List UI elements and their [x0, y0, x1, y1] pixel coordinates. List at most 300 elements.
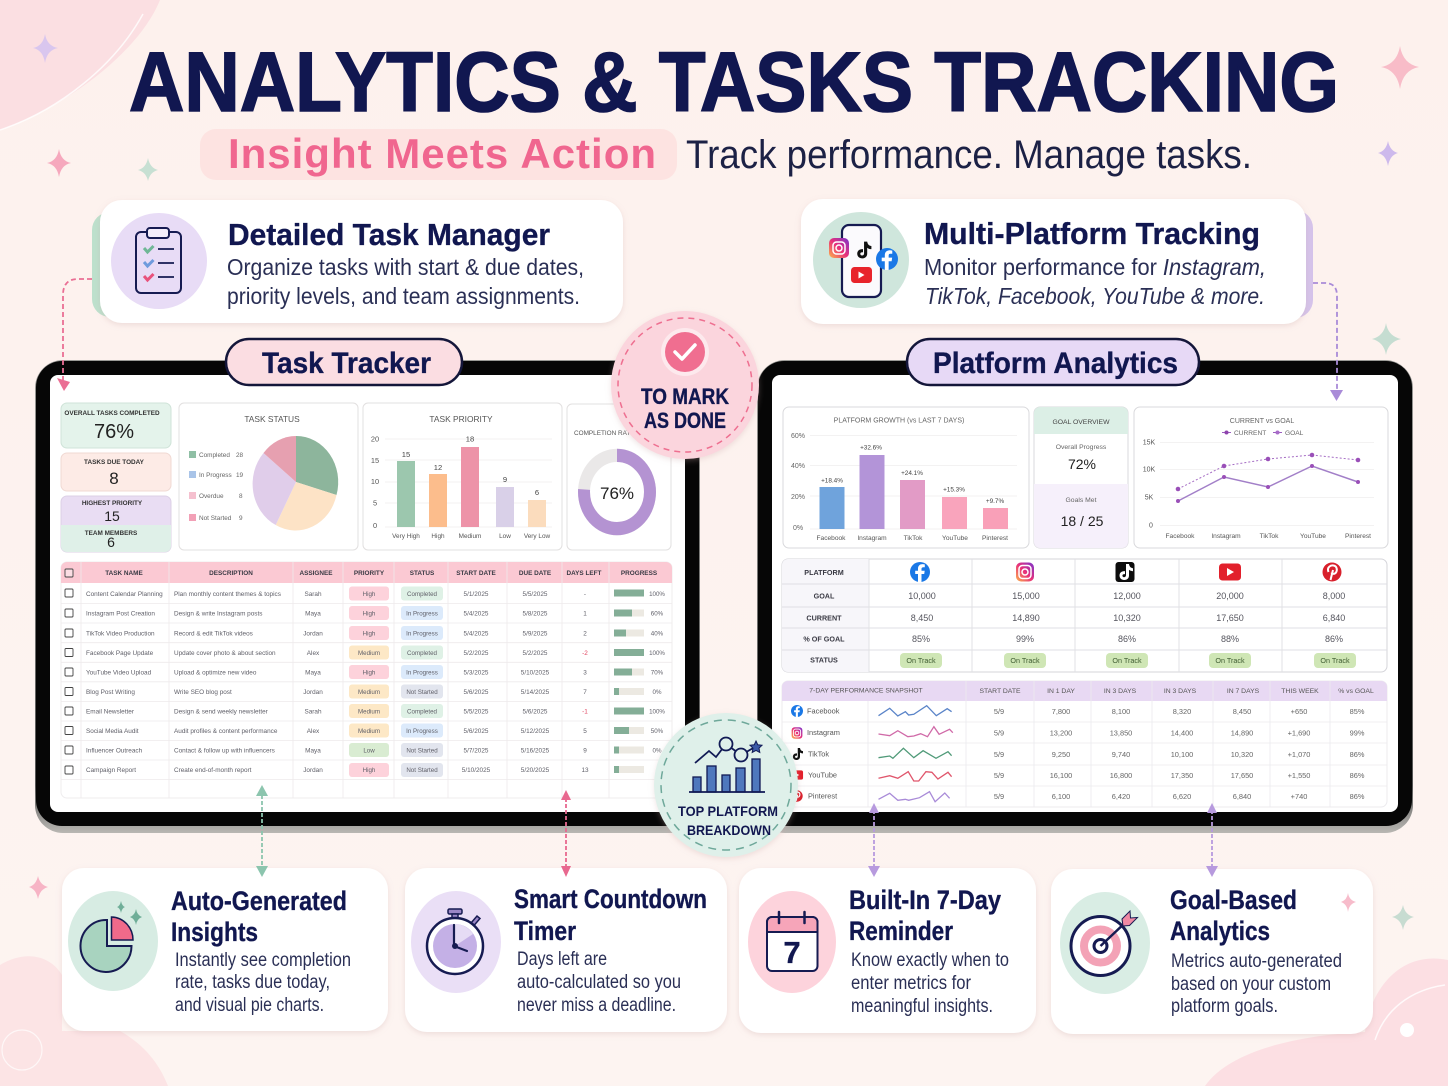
row: instagram post creation: Instagram Post Creation [86, 610, 155, 618]
row: facebook [791, 705, 1365, 717]
row: influencer outreach: 9 [583, 748, 587, 754]
row: youtube video upload: 3 [583, 670, 587, 676]
heading: Timer [514, 916, 576, 946]
badge: to mark as done: AS DONE [644, 408, 726, 433]
row: pinterest: 6,840 [1233, 792, 1251, 801]
legend: 19 [236, 472, 244, 479]
table values: 86% [1118, 634, 1136, 644]
legend: 9 [239, 515, 243, 522]
body text [851, 950, 1009, 1017]
row: pinterest [791, 790, 1365, 802]
row: youtube: 17,650 [1231, 771, 1253, 780]
chart: task priority bars [363, 403, 562, 550]
row: social media audit: 5/6/2025 [464, 728, 489, 735]
row: tiktok video production: TikTok Video Production [86, 630, 155, 638]
table header: IN 3 DAYS [1104, 688, 1137, 695]
chart: task priority bars: 0 [373, 521, 377, 530]
table header: % vs GOAL [1338, 688, 1374, 695]
legend [1222, 430, 1304, 437]
row: facebook page update [65, 646, 665, 660]
row: pinterest: 6,100 [1052, 792, 1070, 801]
row: content calendar planning [65, 586, 665, 600]
icon: check mark [661, 328, 709, 376]
row: facebook page update: 100% [649, 650, 665, 657]
arrow: platform tracking to analytics [1313, 283, 1343, 401]
chart: current vs goal: 10K [1143, 466, 1156, 474]
body text: Instantly see completion [175, 950, 351, 971]
row: pinterest: 6,620 [1173, 792, 1191, 801]
row: email newsletter: Completed [407, 708, 438, 716]
legend: GOAL [1285, 430, 1304, 437]
row: tiktok video production: High [363, 630, 376, 638]
chart: current vs goal [1134, 407, 1388, 548]
body text: enter metrics for [851, 973, 972, 994]
row: social media audit: 5 [583, 728, 587, 735]
body text: auto-calculated so you [517, 972, 681, 993]
kpi: tasks due today: 8 [109, 469, 119, 488]
legend: In Progress [199, 472, 232, 479]
row: facebook page update: -2 [582, 650, 588, 657]
row: youtube: 86% [1350, 771, 1365, 780]
row: youtube: 17,350 [1171, 771, 1193, 780]
table header [809, 688, 1374, 695]
arrow: insights [256, 785, 268, 877]
heading: Smart Countdown [514, 884, 707, 914]
sparkle [1392, 905, 1414, 930]
heading: Reminder [849, 916, 953, 946]
table header: ASSIGNEE [299, 570, 333, 577]
heading: Insights [171, 917, 258, 947]
row: campaign report: Campaign Report [86, 767, 136, 774]
table header: IN 1 DAY [1047, 688, 1075, 695]
chart: platform growth: +15.3% [943, 486, 965, 494]
row: pinterest: 86% [1350, 792, 1365, 801]
row: campaign report: 13 [581, 767, 589, 774]
row: youtube: 5/9 [994, 771, 1004, 780]
arrow: reminder [868, 803, 880, 877]
row: content calendar planning: 5/1/2025 [464, 591, 489, 598]
row: influencer outreach: Contact & follow up with influencers [174, 748, 275, 754]
table header: IN 7 DAYS [1227, 688, 1260, 695]
row: campaign report: 5/10/2025 [462, 767, 491, 774]
icon: bar chart with trend line [689, 738, 765, 792]
chart: current vs goal: YouTube [1300, 533, 1326, 540]
card: auto-generated insights [62, 868, 388, 1031]
kpi: highest priority and team members: 15 [104, 508, 120, 524]
tablet: platform analytics [757, 360, 1413, 833]
row: facebook page update: Alex [307, 650, 320, 657]
sparkle [29, 876, 48, 899]
row: instagram post creation: 60% [651, 610, 664, 618]
row: content calendar planning: Plan monthly content themes & topics [174, 591, 281, 598]
row: content calendar planning: - [584, 591, 586, 598]
panel: goal overview: GOAL OVERVIEW [1052, 419, 1110, 426]
row: pinterest: +740 [1291, 792, 1307, 801]
row labels: CURRENT [806, 614, 842, 622]
table header: START DATE [456, 570, 496, 577]
row: influencer outreach: 0% [653, 748, 662, 754]
row labels: % OF GOAL [803, 634, 845, 644]
heading: Multi-Platform Tracking [924, 216, 1260, 251]
chart: platform growth: Instagram [857, 535, 887, 542]
row: youtube: 16,100 [1050, 771, 1072, 780]
row: instagram post creation: In Progress [406, 610, 438, 618]
table header: STATUS [410, 570, 435, 577]
heading pill: task tracker [226, 339, 462, 385]
table values: 15,000 [1012, 591, 1040, 601]
body text: Organize tasks with start & due dates, [227, 254, 584, 280]
kpi: tasks due today: TASKS DUE TODAY [84, 459, 145, 466]
icon: youtube [1219, 564, 1241, 580]
chart: task priority bars: 15 [371, 456, 379, 465]
legend: CURRENT [1234, 430, 1266, 437]
row: youtube video upload: 70% [651, 670, 664, 676]
arrow: goal analytics [1206, 803, 1218, 877]
table values: 99% [1016, 634, 1034, 644]
subtitle tagline: Insight Meets Action [228, 130, 656, 177]
row: tiktok: 10,100 [1171, 750, 1193, 759]
row: influencer outreach: Influencer Outreach [86, 748, 143, 754]
decorative blob: bottom left [0, 956, 168, 1086]
chart: platform growth: +24.1% [901, 470, 923, 477]
heading pill: platform analytics [907, 339, 1199, 385]
table values: 12,000 [1113, 591, 1141, 601]
icon: clipboard checklist [111, 213, 207, 309]
chart: platform growth: 0% [793, 525, 803, 532]
row: youtube video upload: YouTube Video Upload [86, 670, 152, 676]
row: influencer outreach [65, 743, 662, 757]
row: tiktok: 9,740 [1112, 750, 1130, 759]
table values: 10,000 [908, 591, 936, 601]
body text: Know exactly when to [851, 950, 1009, 971]
callout: detailed task manager [92, 200, 623, 323]
panel: goal overview [1034, 407, 1128, 548]
arrow: task manager to tracker [57, 279, 92, 391]
chart: completion rate donut: COMPLETION RATE [574, 430, 635, 437]
row: social media audit: In Progress [406, 728, 438, 735]
heading: Built-In 7-Day [849, 885, 1001, 915]
body text [175, 950, 351, 1016]
chart: platform growth: +18.4% [821, 478, 843, 484]
row: blog post writing: Jordan [303, 689, 323, 696]
table: task list [61, 562, 672, 798]
row: social media audit: Medium [358, 728, 380, 735]
chart: task priority bars: 9 [503, 475, 507, 484]
subtitle description: Track performance. Manage tasks. [686, 133, 1252, 177]
chart: completion rate donut: 76% [600, 484, 634, 503]
chart: platform growth: 20% [791, 494, 805, 501]
row: influencer outreach: 5/16/2025 [521, 748, 550, 754]
chart: completion rate donut [567, 404, 671, 550]
chart: platform growth: PLATFORM GROWTH (vs LAST 7 DAYS) [834, 418, 964, 424]
row: email newsletter: Sarah [304, 708, 322, 716]
body text: rate, tasks due today, [175, 972, 330, 993]
row: facebook page update: Medium [358, 650, 380, 657]
table: platform goals [782, 559, 1387, 672]
subtitle [200, 129, 1252, 180]
row: instagram post creation: 1 [583, 610, 587, 618]
body text: platform goals. [1171, 996, 1278, 1017]
chart: task priority bars: Medium [459, 533, 481, 540]
legend [189, 451, 244, 522]
kpi: tasks due today [61, 453, 171, 491]
legend: Overdue [199, 493, 224, 500]
chart: task priority bars: 6 [535, 488, 539, 497]
row: blog post writing: 7 [583, 689, 587, 696]
row: youtube video upload: Upload & optimize new video [174, 670, 257, 676]
table header: PROGRESS [621, 570, 658, 577]
tablet: task tracker [35, 360, 700, 833]
chart: task priority bars: 5 [373, 498, 377, 508]
heading [514, 884, 707, 946]
row: facebook: 8,100 [1112, 707, 1130, 716]
row: instagram: 14,400 [1171, 728, 1193, 738]
decorative blob: bottom right [1205, 958, 1448, 1086]
row: influencer outreach: Low [363, 748, 375, 754]
row: facebook page update: 5/2/2025 [523, 650, 548, 657]
row: blog post writing: Write SEO blog post [174, 689, 232, 696]
panel: goal overview: Goals Met [1066, 497, 1097, 504]
row: blog post writing: 5/14/2025 [521, 689, 550, 696]
chart: task priority bars: 18 [466, 434, 474, 444]
table: 7-day performance snapshot [782, 681, 1387, 807]
table values: 6,840 [1323, 613, 1345, 623]
row: instagram post creation: 5/8/2025 [523, 610, 548, 618]
chart: current vs goal: 0 [1149, 522, 1153, 530]
sparkle [1378, 141, 1398, 166]
chart: current vs goal: 5K [1145, 494, 1154, 502]
row: facebook: 85% [1350, 707, 1365, 716]
row: instagram post creation: High [363, 610, 376, 618]
chart: platform growth: +9.7% [986, 498, 1004, 505]
row: social media audit: Social Media Audit [86, 728, 139, 735]
card: goal-based analytics [1051, 869, 1373, 1034]
body text: TikTok, Facebook, YouTube & more. [925, 283, 1265, 309]
body text: based on your custom [1171, 974, 1331, 995]
status pills: On Track [1112, 656, 1142, 665]
heading: Analytics [1170, 916, 1270, 946]
kpi: highest priority and team members [61, 496, 171, 552]
table header: START DATE [979, 688, 1021, 695]
table values: 10,320 [1113, 613, 1141, 623]
badge: to mark as done [611, 311, 759, 459]
sparkle [1372, 323, 1401, 355]
heading [171, 886, 347, 947]
row: email newsletter: -1 [582, 708, 588, 716]
icon: stopwatch [411, 891, 501, 993]
row: facebook page update: 5/2/2025 [464, 650, 489, 657]
status pills: On Track [1010, 656, 1040, 665]
body text [924, 254, 1266, 309]
row: blog post writing: 0% [653, 689, 662, 696]
panel: goal overview: 72% [1068, 456, 1096, 472]
kpi: highest priority and team members: 6 [107, 534, 115, 550]
table header: 7-DAY PERFORMANCE SNAPSHOT [809, 688, 923, 694]
chart: current vs goal: Instagram [1211, 533, 1241, 540]
row: campaign report: 5/20/2025 [521, 767, 550, 774]
badge: top platform breakdown: BREAKDOWN [687, 822, 771, 838]
table values: 17,650 [1216, 613, 1244, 623]
chart: platform growth: TikTok [904, 535, 923, 542]
row: content calendar planning: Sarah [304, 591, 322, 598]
row: content calendar planning: 100% [649, 591, 665, 598]
callout: multi-platform tracking [801, 199, 1313, 324]
row: influencer outreach: 5/7/2025 [464, 748, 489, 754]
heading: Detailed Task Manager [228, 217, 550, 252]
heading: Auto-Generated [171, 886, 347, 916]
chart: platform growth [783, 407, 1029, 548]
row labels: GOAL [814, 592, 835, 600]
row: content calendar planning: High [363, 591, 376, 598]
chart: platform growth: Facebook [817, 535, 846, 542]
body text: meaningful insights. [851, 996, 993, 1017]
sparkle [1341, 893, 1356, 912]
sparkle [33, 34, 58, 63]
row: email newsletter: Medium [358, 708, 380, 716]
table header [65, 569, 658, 577]
row: youtube video upload: Maya [305, 670, 321, 676]
row: email newsletter: Design & send weekly newsletter [174, 708, 269, 716]
row: tiktok video production [65, 626, 664, 640]
row: instagram: 99% [1350, 728, 1365, 738]
body text: priority levels, and team assignments. [227, 283, 580, 309]
row labels [803, 568, 845, 664]
chart: platform growth: 40% [791, 463, 805, 470]
chart: platform growth: 60% [791, 433, 805, 440]
title: ANALYTICS & TASKS TRACKING [129, 35, 1339, 129]
icon: pie chart [68, 891, 158, 991]
row: instagram post creation: Maya [305, 610, 321, 618]
row: youtube: 16,800 [1110, 771, 1132, 780]
table header: DESCRIPTION [209, 570, 253, 577]
legend: 28 [236, 452, 244, 459]
row: instagram: 13,850 [1110, 728, 1132, 738]
icon: calendar: 7 [783, 935, 801, 970]
row: youtube: YouTube [808, 770, 837, 780]
chart: task priority bars: Low [499, 533, 511, 540]
row: blog post writing: Not Started [406, 689, 438, 696]
row: tiktok video production: Record & edit TikTok videos [174, 630, 253, 638]
row: tiktok: +1,070 [1288, 750, 1310, 759]
table values: 8,000 [1323, 591, 1345, 601]
row: email newsletter: 100% [649, 708, 665, 716]
body text [1171, 951, 1342, 1017]
chart: task priority bars: High [431, 533, 445, 540]
row: blog post writing: 5/6/2025 [464, 689, 489, 696]
body text: Days left are [517, 949, 607, 970]
table header: PRIORITY [354, 570, 385, 577]
row: influencer outreach: Maya [305, 748, 321, 754]
row: tiktok: TikTok [808, 750, 829, 758]
card: built-in 7-day reminder [739, 868, 1036, 1033]
table values [908, 591, 1345, 644]
chart: platform growth: +32.6% [860, 444, 882, 452]
row: pinterest: 5/9 [994, 792, 1004, 801]
row: instagram: 13,200 [1050, 728, 1072, 738]
row labels: PLATFORM [804, 568, 844, 577]
chart: current vs goal: CURRENT vs GOAL [1230, 418, 1294, 425]
heading pill: task tracker: Task Tracker [262, 347, 431, 380]
row: social media audit: Alex [307, 728, 320, 735]
table values: 8,450 [911, 613, 933, 623]
badge: top platform breakdown: TOP PLATFORM [678, 803, 778, 819]
row: facebook page update: Facebook Page Update [86, 650, 154, 657]
table values: 86% [1325, 634, 1343, 644]
chart: current vs goal: Pinterest [1345, 533, 1371, 540]
table header: TASK NAME [105, 570, 143, 577]
row: instagram post creation [65, 606, 664, 620]
row: social media audit [65, 724, 664, 738]
row: email newsletter [65, 704, 665, 718]
row: blog post writing: Blog Post Writing [86, 689, 135, 696]
kpi: highest priority and team members: TEAM MEMBERS [85, 530, 138, 537]
row: facebook: +650 [1291, 707, 1307, 716]
row: facebook page update: Update cover photo & about section [174, 650, 276, 657]
chart: platform growth: YouTube [942, 535, 968, 542]
chart: task priority bars: 12 [434, 463, 442, 472]
body text: never miss a deadline. [517, 995, 676, 1016]
table values: 14,890 [1012, 613, 1040, 623]
row: youtube video upload: 5/3/2025 [464, 670, 489, 676]
heading pill: platform analytics: Platform Analytics [933, 347, 1178, 380]
row: campaign report: Jordan [303, 767, 323, 774]
row: blog post writing [65, 684, 662, 698]
row: content calendar planning: 5/5/2025 [523, 591, 548, 598]
row: tiktok video production: In Progress [406, 630, 438, 638]
chart: platform growth: Pinterest [982, 535, 1008, 542]
chart: task priority bars: 10 [371, 477, 379, 486]
row: facebook: 7,800 [1052, 707, 1070, 716]
table header: DAYS LEFT [567, 570, 602, 577]
row: instagram post creation: 5/4/2025 [464, 610, 489, 618]
row: instagram: 5/9 [994, 728, 1004, 738]
sparkle [138, 158, 158, 181]
table header: THIS WEEK [1281, 688, 1319, 695]
row: email newsletter: 5/6/2025 [523, 708, 548, 716]
chart: task priority bars: 15 [402, 450, 410, 459]
table values: 85% [912, 634, 930, 644]
row: youtube: +1,550 [1288, 771, 1310, 780]
icon: instagram [1016, 562, 1034, 582]
icon: facebook [910, 562, 930, 582]
row: tiktok video production: Jordan [303, 630, 323, 638]
icon: pinterest [1322, 562, 1342, 582]
row: youtube video upload: In Progress [406, 670, 438, 676]
row: facebook: 8,320 [1173, 707, 1191, 716]
body text: and visual pie charts. [175, 995, 324, 1016]
row: social media audit: 50% [651, 728, 664, 735]
row: youtube video upload [65, 665, 664, 679]
row: instagram post creation: Design & write Instagram posts [174, 610, 262, 618]
chart: task priority bars: 20 [371, 434, 379, 444]
kpi: overall tasks completed: 76% [94, 421, 134, 443]
body text: Monitor performance for Instagram, [924, 254, 1266, 280]
row: content calendar planning: Completed [407, 591, 438, 598]
chart: current vs goal: Facebook [1166, 533, 1195, 540]
row: tiktok [793, 748, 1365, 760]
heading [1170, 885, 1297, 946]
legend: 8 [239, 493, 243, 500]
row: influencer outreach: Not Started [406, 748, 438, 754]
status pills [900, 653, 1356, 668]
row: tiktok: 9,250 [1052, 750, 1070, 759]
badge: to mark as done: TO MARK [641, 384, 729, 409]
kpi: overall tasks completed: OVERALL TASKS COMPLETED [64, 410, 160, 417]
row: social media audit: Audit profiles & content performance [174, 728, 278, 735]
pie slices [253, 436, 338, 530]
chart: current vs goal: TikTok [1260, 533, 1279, 540]
row: tiktok video production: 2 [583, 630, 587, 638]
